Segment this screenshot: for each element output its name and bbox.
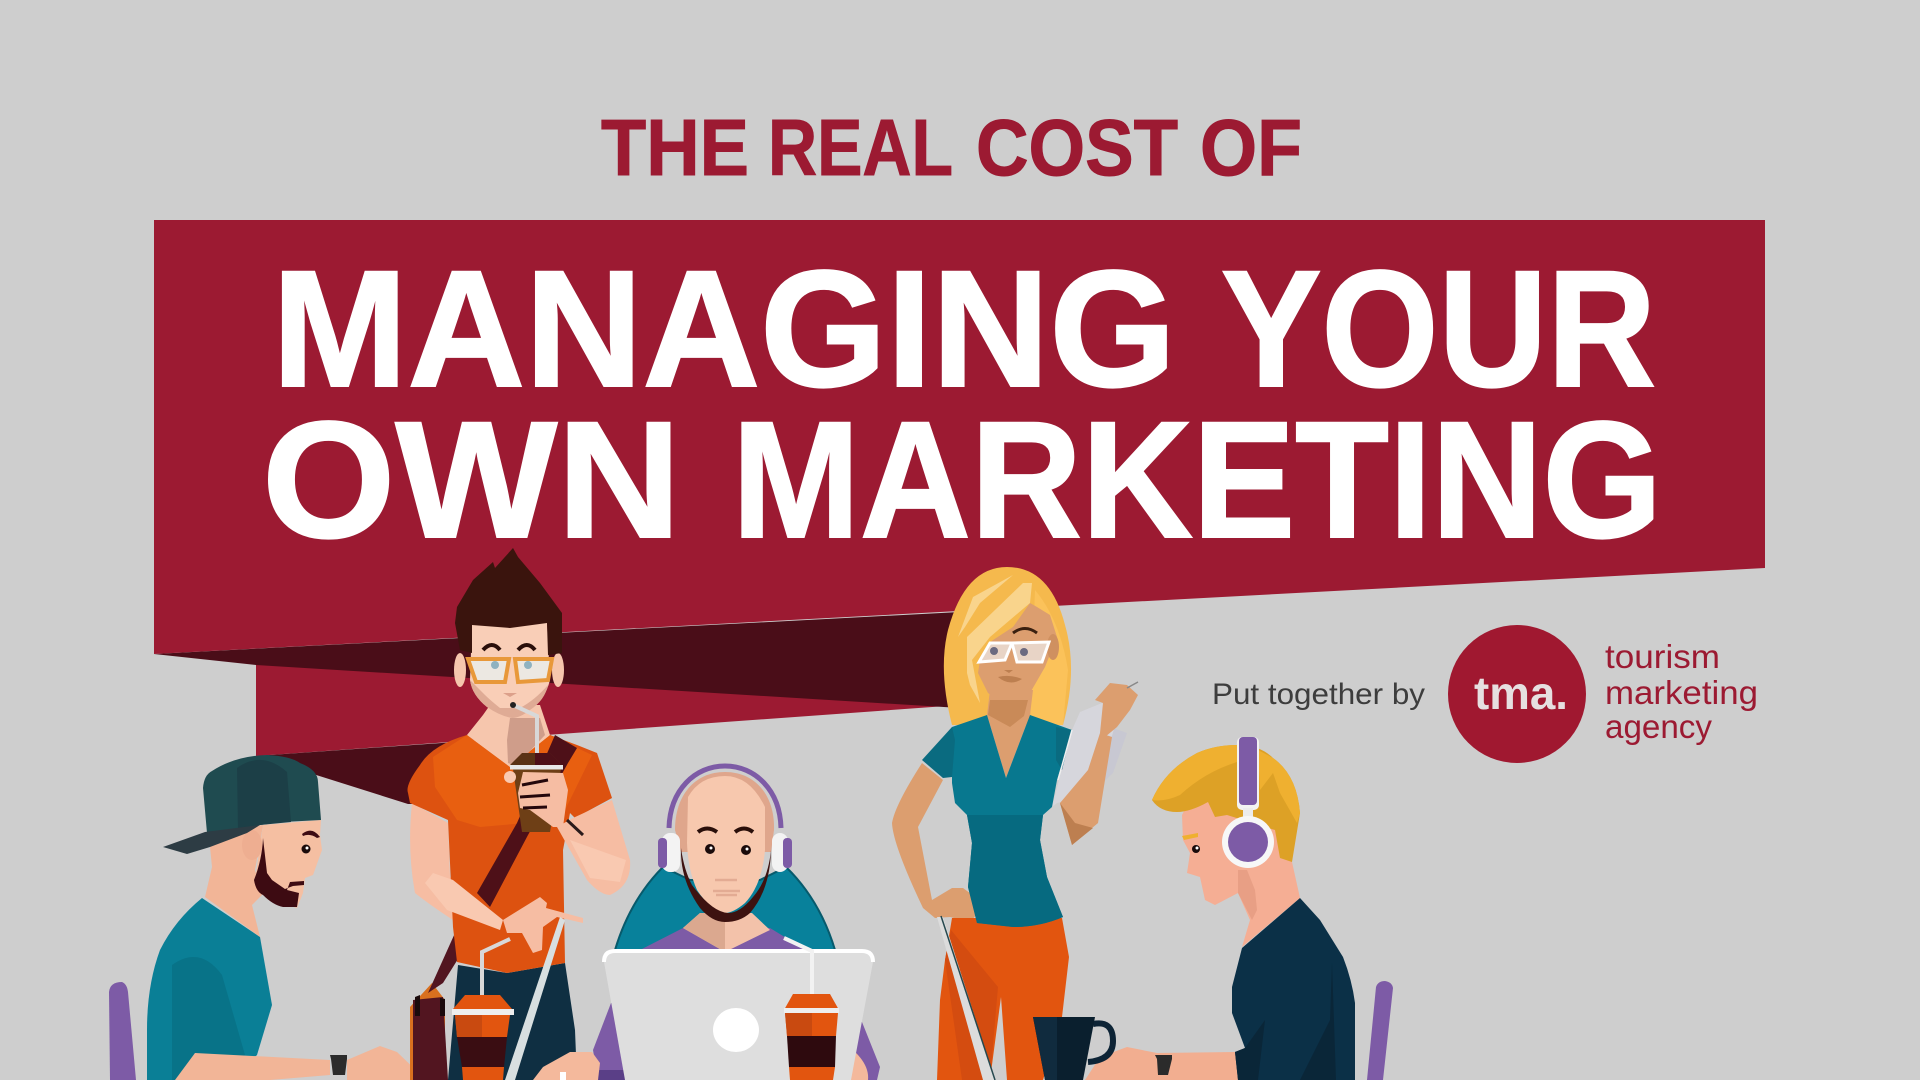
character: woman with tablet (892, 567, 1138, 1080)
logo: tourism marketing agency wordmark (1605, 638, 1758, 745)
title: managing your own marketing: OWN (262, 388, 681, 573)
title: managing your own marketing: MANAGING (272, 237, 1176, 422)
icon: black mug (1033, 1017, 1113, 1080)
icon: coffee cup centre (784, 938, 839, 1080)
character: blond man with headphones (1085, 737, 1393, 1080)
icon: laptop lid edge beside standing man (505, 917, 565, 1080)
title: the real cost of: OF (1200, 103, 1302, 192)
hands on keyboard (533, 1052, 600, 1080)
title: managing your own marketing (262, 237, 1662, 573)
credit: put together by: Put together by (1212, 678, 1425, 711)
banner: dark fold shadow (154, 612, 960, 708)
character: standing man with coffee (408, 548, 630, 1080)
character: man with purple headphones at laptop (593, 766, 880, 1080)
title: the real cost of: THE (601, 103, 749, 192)
title: the real cost of: REAL (768, 103, 953, 192)
character: man with cap (109, 755, 422, 1080)
logo: tourism marketing agency wordmark: tourism (1605, 638, 1720, 675)
logo: tma circle (1448, 625, 1586, 763)
icon: silver laptop with logo (604, 951, 873, 1080)
logo: tourism marketing agency wordmark: marketing (1605, 674, 1758, 711)
title: the real cost of: COST (976, 103, 1178, 192)
logo: tourism marketing agency wordmark: agency (1605, 708, 1712, 745)
icon: coffee cup left (452, 939, 514, 1080)
logo: tma circle: tma. (1474, 667, 1568, 719)
title: managing your own marketing: MARKETING (732, 388, 1662, 573)
banner: back ribbon fold (256, 625, 960, 804)
title: managing your own marketing: YOUR (1221, 237, 1656, 422)
banner: main ribbon (154, 220, 1765, 654)
title: the real cost of (601, 103, 1302, 192)
